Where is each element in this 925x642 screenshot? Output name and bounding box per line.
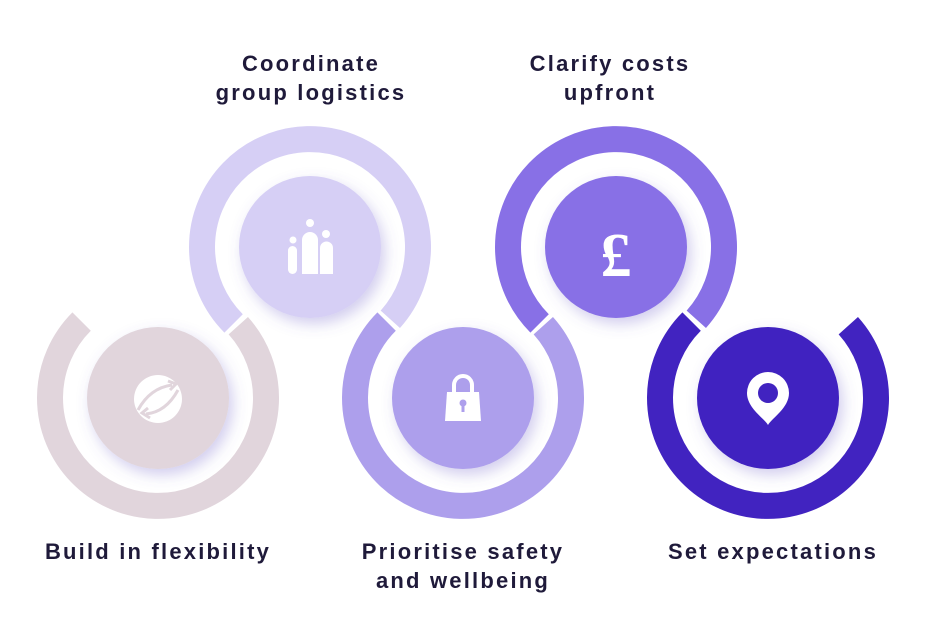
heading: set expectations: Set expectations bbox=[668, 539, 878, 564]
heading: clarify costs upfront bbox=[530, 51, 690, 105]
ring 3: prioritise safety bbox=[355, 322, 571, 506]
ring 5: set expectations bbox=[660, 322, 876, 506]
icon: padlock bbox=[445, 376, 481, 421]
ring 4: clarify costs bbox=[508, 139, 724, 323]
heading: coordinate group logistics: Coordinate bbox=[242, 51, 380, 76]
ring 1: build in flexibility bbox=[50, 322, 266, 506]
ring 2: coordinate group logistics bbox=[202, 139, 418, 323]
icon: people bbox=[288, 219, 333, 274]
icon: pound sign: £ bbox=[600, 222, 632, 290]
heading: clarify costs upfront: Clarify costs bbox=[530, 51, 690, 76]
heading: coordinate group logistics bbox=[216, 51, 406, 105]
icon: swap arrows bbox=[134, 375, 182, 423]
heading: build in flexibility: Build in flexibility bbox=[45, 539, 271, 564]
icon: map pin bbox=[747, 372, 789, 425]
heading: prioritise safety: and wellbeing bbox=[376, 568, 550, 593]
heading: prioritise safety bbox=[362, 539, 564, 593]
heading: clarify costs upfront: upfront bbox=[564, 80, 656, 105]
heading: coordinate group logistics: group logistics bbox=[216, 80, 406, 105]
heading: prioritise safety: Prioritise safety bbox=[362, 539, 564, 564]
